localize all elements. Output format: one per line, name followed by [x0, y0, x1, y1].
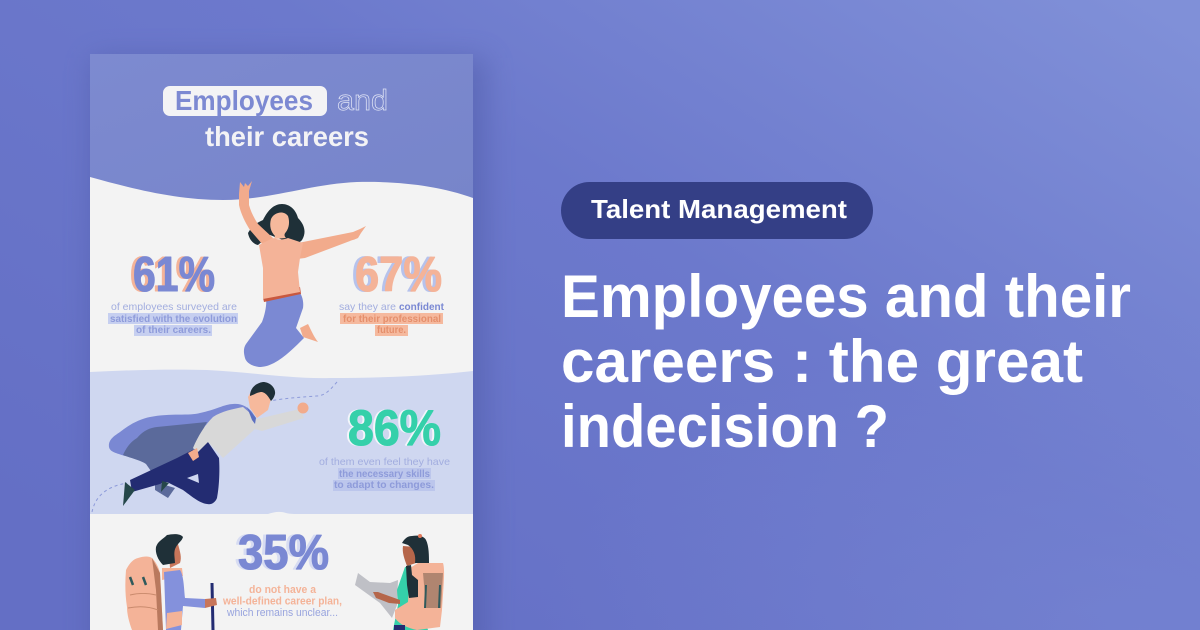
gap behind knee [187, 474, 199, 483]
harness lower [166, 611, 182, 629]
header wave [90, 54, 473, 200]
number shadow: 61% [130, 248, 212, 302]
icon: flying man [92, 382, 337, 512]
shoe back [123, 482, 135, 506]
title pill [163, 86, 327, 116]
hair tie [418, 534, 422, 538]
icon: hiker with map [355, 534, 444, 630]
hand [205, 598, 217, 608]
head [248, 388, 272, 418]
foot [300, 324, 318, 342]
caption line 2: well-defined career plan, [222, 596, 342, 608]
caption: say they are [339, 301, 396, 313]
shoe front [161, 481, 169, 492]
green shirt [393, 566, 428, 630]
hair [248, 204, 305, 245]
caption: of employees surveyed are [111, 301, 237, 313]
caption line 2: the necessary skills [339, 468, 430, 480]
title word: and: and [337, 85, 388, 117]
stat: 61% [108, 248, 238, 336]
bottle [406, 565, 418, 598]
poster page [90, 54, 473, 630]
cape collar [247, 407, 256, 424]
title line: their careers: their careers [205, 121, 369, 152]
outstretched arm [297, 226, 366, 259]
number shadow: 86% [346, 400, 439, 456]
pack brown panel [423, 573, 443, 608]
backpack [395, 563, 444, 630]
hand [188, 448, 199, 461]
stat: 86% [319, 400, 450, 491]
arm [373, 592, 400, 604]
trousers [130, 442, 219, 504]
panel shadow [92, 58, 486, 630]
caption line 2: satisfied with the evolution [110, 313, 237, 325]
caption bold: confident [399, 301, 444, 313]
hiking pole [212, 583, 213, 630]
section bottom: career plan [90, 512, 473, 630]
title word: Employees: Employees [175, 85, 313, 116]
headline line 2: careers : the great [561, 328, 1083, 395]
red shirt hem [263, 287, 301, 302]
stat: 35% [222, 526, 342, 619]
torso and arm [193, 407, 304, 458]
face [168, 540, 181, 568]
map [355, 573, 398, 618]
panel: infographic poster [90, 54, 473, 630]
caption highlight [108, 313, 238, 336]
headline line 1: Employees and their [561, 263, 1131, 330]
caption line 3: future. [377, 324, 406, 336]
caption: do not have a [249, 584, 317, 596]
headline line 3: indecision ? [561, 393, 889, 460]
number: 67% [355, 248, 442, 302]
pink top [259, 238, 303, 299]
pill label: Talent Management [591, 194, 847, 224]
backpack [125, 556, 163, 630]
hair [250, 382, 275, 401]
hair [402, 536, 429, 563]
pack straps [425, 585, 440, 608]
caption line 3: which remains unclear... [226, 607, 338, 619]
number shadow: 67% [352, 248, 439, 302]
icon: hiker with backpack [125, 534, 217, 630]
section band: skills [90, 370, 473, 514]
dashed flight path left [92, 483, 127, 512]
caption highlight [340, 313, 443, 336]
face [270, 212, 289, 239]
face [403, 546, 416, 566]
pack seams [128, 594, 158, 610]
caption line 2: for their professional [343, 313, 441, 325]
pack side [152, 558, 163, 630]
cape outer [109, 404, 258, 456]
shirt [164, 570, 205, 630]
cape lower piece [155, 482, 175, 498]
harness top [162, 568, 183, 580]
cape inner [123, 422, 207, 474]
raised arm [239, 181, 273, 245]
headline [561, 263, 1131, 460]
hair [156, 534, 183, 565]
caption: of them even feel they have [319, 456, 450, 468]
caption line 3: to adapt to changes. [334, 479, 434, 491]
number: 61% [133, 248, 215, 302]
number: 35% [238, 526, 329, 580]
trousers [394, 625, 405, 630]
stat: 67% [339, 248, 444, 336]
pill background [561, 182, 873, 239]
number: 86% [348, 400, 441, 456]
icon: jumping woman [239, 181, 366, 367]
dashed flight path right [263, 382, 337, 416]
caption highlight [333, 468, 435, 491]
fist [298, 402, 308, 414]
title [163, 85, 388, 152]
category pill [561, 182, 873, 239]
caption line 3: of their careers. [136, 324, 211, 336]
pack straps [130, 577, 146, 585]
jeans [244, 289, 304, 367]
number shadow: 35% [235, 526, 326, 580]
